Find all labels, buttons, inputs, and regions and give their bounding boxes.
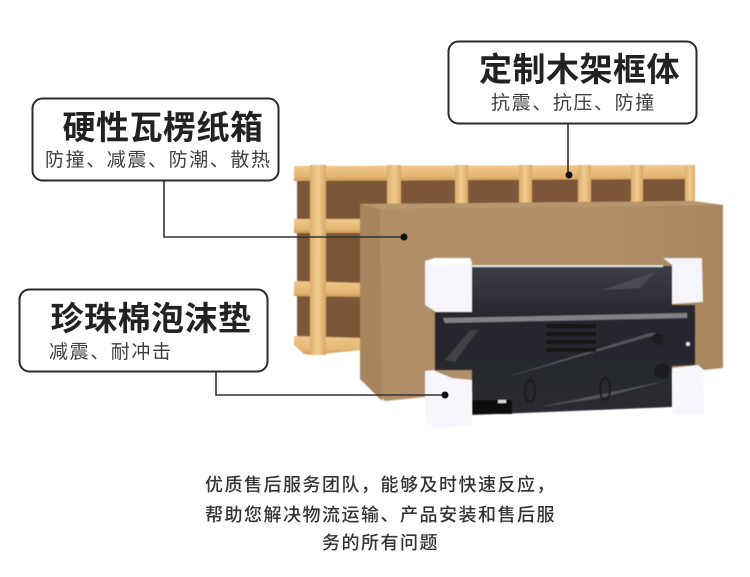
- callout: wooden frame: [448, 42, 696, 124]
- foam corner: top left: [425, 258, 472, 312]
- heading: corrugated carton: 硬性瓦楞纸箱: [62, 109, 264, 146]
- foam corner: bottom left: [425, 370, 472, 428]
- text: wooden frame features: 抗震、抗压、防撞: [491, 92, 656, 114]
- callout: pearl foam: [20, 290, 268, 372]
- foam corner: bottom right: [672, 365, 704, 414]
- heading: pearl foam: 珍珠棉泡沫垫: [50, 300, 252, 337]
- wooden crate: [294, 165, 695, 355]
- leader line: cardboard: [164, 181, 408, 240]
- service statement: 务的所有问题: [322, 533, 439, 553]
- foam corner: top right: [663, 258, 703, 304]
- television back: [435, 265, 695, 415]
- leader line: crate: [566, 124, 572, 178]
- callout: corrugated carton: [32, 98, 278, 180]
- leader line: foam: [216, 372, 448, 398]
- service statement: 优质售后服务团队，能够及时快速反应，: [205, 474, 556, 495]
- text: carton features: 防撞、减震、防潮、散热: [45, 149, 272, 171]
- cardboard box: [360, 201, 723, 401]
- service statement: [205, 474, 556, 553]
- service statement: 帮助您解决物流运输、产品安装和售后服: [205, 505, 556, 525]
- heading: wooden frame: 定制木架框体: [479, 51, 680, 88]
- text: foam features: 减震、耐冲击: [49, 341, 173, 363]
